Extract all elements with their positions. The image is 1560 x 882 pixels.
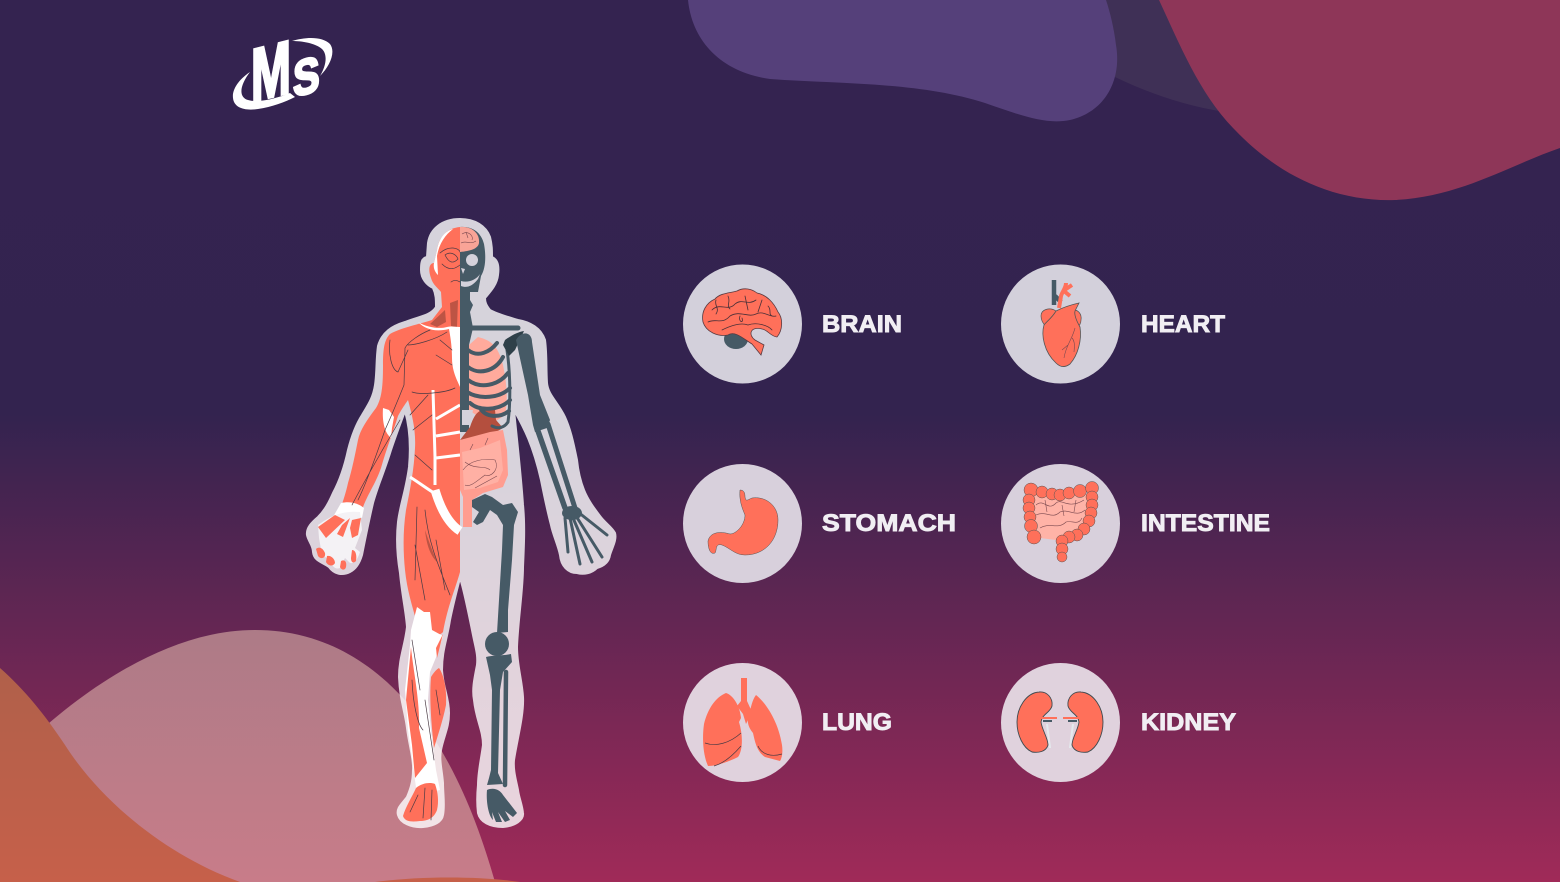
right lung <box>748 695 782 761</box>
card: lung <box>683 663 892 782</box>
muscle lines <box>352 248 460 600</box>
thigh shadow <box>425 530 437 562</box>
card: intestine <box>1001 464 1270 583</box>
wrist tendon <box>333 502 364 518</box>
circle <box>1001 663 1120 782</box>
heart veins <box>1062 328 1075 358</box>
humerus <box>516 333 550 432</box>
organs half <box>460 227 607 822</box>
eye socket <box>466 254 478 266</box>
intestine lines <box>463 438 497 488</box>
clavicle <box>468 326 518 330</box>
blob: pink bottom left <box>30 630 495 882</box>
icon: stomach <box>708 490 778 555</box>
circle <box>683 663 802 782</box>
circle <box>1001 264 1120 384</box>
vein <box>1054 280 1061 305</box>
left kidney <box>1017 692 1052 752</box>
small intestine <box>462 440 503 490</box>
icon: kidneys <box>1017 692 1103 752</box>
lungs behind ribs <box>469 337 507 425</box>
fingers <box>565 512 607 564</box>
foot bones <box>487 789 517 822</box>
intestine folds <box>1036 500 1085 528</box>
trachea <box>737 678 752 724</box>
blob: orange bottom left <box>0 668 520 882</box>
logo letters: M <box>251 25 291 119</box>
icon: lungs <box>703 678 782 766</box>
hand <box>316 512 362 570</box>
cerebrum <box>703 289 782 355</box>
icon: brain <box>703 289 782 355</box>
knee and shin tendon <box>405 607 443 795</box>
label: KIDNEY <box>1141 709 1236 736</box>
label: LUNG <box>822 709 892 736</box>
white tendons torso <box>333 229 460 518</box>
icon: heart <box>1041 280 1081 366</box>
muscle silhouette: upper body <box>342 227 460 635</box>
heart body <box>1043 303 1081 366</box>
head highlight <box>434 229 453 275</box>
brain folds <box>461 232 476 243</box>
neck shadow <box>430 300 458 327</box>
wrist <box>562 506 582 520</box>
spine <box>460 290 473 432</box>
rib cage side <box>492 350 510 428</box>
heart lobes <box>1041 309 1081 328</box>
renal vessels <box>1047 724 1073 748</box>
right arm bones <box>516 333 607 564</box>
blob: purple top <box>688 0 1117 121</box>
hand white palm <box>318 512 362 569</box>
logo: S <box>293 46 320 108</box>
label: INTESTINE <box>1141 510 1270 537</box>
muscle half <box>316 227 460 821</box>
logo <box>233 25 332 119</box>
skull <box>460 227 485 292</box>
blob: dark top <box>1100 0 1225 112</box>
body halo <box>307 219 615 827</box>
outer calf muscle <box>406 647 427 778</box>
card: heart <box>1001 264 1225 384</box>
shin and foot lines <box>410 640 440 820</box>
label: BRAIN <box>822 311 902 338</box>
label: HEART <box>1141 311 1225 338</box>
chest tendon <box>418 322 460 387</box>
card: stomach <box>683 464 956 583</box>
inner calf muscle <box>430 668 446 748</box>
lower spine bones <box>462 410 473 425</box>
circle <box>1001 464 1120 583</box>
logo swoosh <box>233 38 332 110</box>
left lung <box>703 693 742 766</box>
thigh lines and lower leg <box>403 607 446 821</box>
liver <box>460 410 503 440</box>
card: kidney <box>1001 663 1236 782</box>
small intestine <box>1032 494 1088 540</box>
hand coral parts <box>316 515 361 570</box>
brain folds <box>708 296 776 330</box>
pelvis and femur <box>472 494 518 633</box>
skull nose and jaw <box>461 268 480 287</box>
cerebellum <box>724 329 748 349</box>
icon: intestine <box>1023 482 1098 562</box>
circle <box>683 464 802 583</box>
aorta <box>1059 283 1072 308</box>
right kidney <box>1068 692 1103 752</box>
ribs <box>467 343 510 416</box>
fibula <box>505 672 506 785</box>
inner knee muscle <box>436 634 443 658</box>
forearm tendon <box>383 408 394 438</box>
human body figure <box>307 219 615 827</box>
circle <box>683 264 802 384</box>
tibia <box>486 654 512 785</box>
scapula <box>503 331 524 356</box>
intestines <box>460 430 508 527</box>
blob: red top right <box>1159 0 1560 200</box>
lung fissures <box>705 733 782 766</box>
forearm bones <box>538 431 565 508</box>
foot <box>403 783 438 821</box>
abdominal tendons <box>410 390 460 531</box>
label: STOMACH <box>822 510 956 537</box>
colon beads <box>1023 482 1098 562</box>
knee <box>485 632 509 656</box>
brain <box>460 227 479 252</box>
card: brain <box>683 264 902 384</box>
